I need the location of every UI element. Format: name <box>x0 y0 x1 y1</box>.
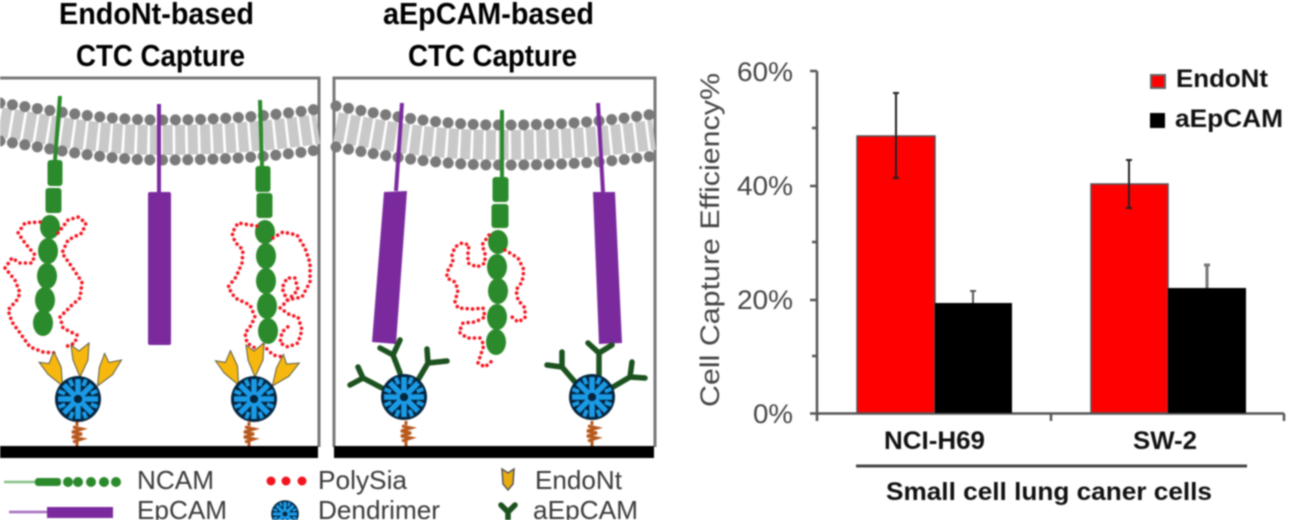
y axis title: Cell Capture Efficiency% <box>695 73 725 407</box>
legend item: NCAM: NCAM <box>137 465 214 495</box>
chart legend: EndoNt <box>1176 65 1269 93</box>
bar chart: cell capture efficiency <box>695 57 1284 506</box>
x axis labels: SW-2 <box>1133 427 1197 455</box>
x axis labels <box>856 427 1247 506</box>
panel: EndoNt-based capture <box>0 78 319 458</box>
y axis labels: 40% <box>737 171 793 201</box>
PolySia chain right <box>228 223 310 357</box>
chart legend: aEpCAM <box>1175 105 1283 133</box>
y axis labels: 0% <box>753 399 793 429</box>
aEpCAM and dendrimer left <box>350 340 447 446</box>
x axis labels: NCI-H69 <box>884 427 985 455</box>
legend item: PolySia <box>266 465 408 495</box>
y axis labels: 20% <box>737 285 793 315</box>
EpCAM receptor right <box>593 103 622 344</box>
PolySia chain <box>447 235 525 367</box>
bars: SW-2 <box>1091 160 1246 413</box>
title: aEpCAM-based CTC Capture: CTC Capture <box>408 38 577 73</box>
title: EndoNt-based CTC Capture: CTC Capture <box>76 38 245 73</box>
legend item: EpCAM <box>9 495 227 520</box>
cell membrane <box>336 106 654 165</box>
capture surface <box>334 446 654 458</box>
title: aEpCAM-based CTC Capture <box>383 0 594 73</box>
EpCAM receptor <box>148 104 171 345</box>
EpCAM receptor left <box>372 103 407 344</box>
NCAM receptor <box>486 110 508 355</box>
NCAM receptor left <box>33 96 62 336</box>
aEpCAM and dendrimer right <box>547 343 645 446</box>
EndoNt and dendrimer left <box>38 343 121 447</box>
legend: diagram components <box>4 465 638 520</box>
chart legend <box>1150 65 1283 133</box>
PolySia chain left <box>5 217 86 353</box>
axes <box>810 71 1284 421</box>
y axis labels: 60% <box>737 57 793 87</box>
bars: NCI-H69 <box>857 93 1012 413</box>
title: EndoNt-based CTC Capture <box>59 0 254 73</box>
cell membrane <box>0 103 318 160</box>
NCAM receptor right <box>255 100 278 344</box>
legend item: PolySia: PolySia <box>318 465 408 495</box>
y axis labels <box>737 57 793 429</box>
panel: aEpCAM-based capture <box>334 78 655 458</box>
EndoNt and dendrimer right <box>215 343 299 447</box>
capture surface <box>0 446 318 458</box>
x axis labels: Small cell lung caner cells <box>886 478 1212 506</box>
legend item: NCAM <box>4 465 214 495</box>
legend item: EndoNt: EndoNt <box>535 465 623 495</box>
